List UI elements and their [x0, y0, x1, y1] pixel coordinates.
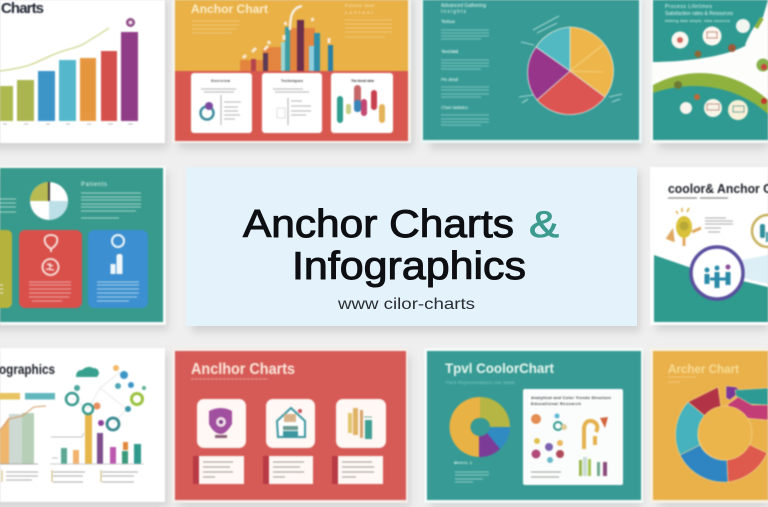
heading: Anclhor Charts [191, 361, 295, 378]
caption text [6, 472, 138, 482]
panel: teal color chart card [424, 348, 643, 503]
icon: people in ring [691, 247, 743, 299]
heading: Process Lifetimes [665, 4, 712, 10]
text block [345, 3, 392, 37]
sub-panel: techniques [262, 73, 322, 133]
heading: Insights [441, 9, 466, 15]
text block: Future text [345, 3, 375, 8]
white infographic panel [523, 389, 623, 485]
legend text: Metric 1 [454, 460, 473, 465]
ampersand: & [529, 204, 559, 245]
skyline bar chart [240, 18, 333, 71]
icon: purple pin [126, 18, 135, 27]
sub-panel: overview [191, 73, 252, 133]
white infographic panel: Educational Research [531, 401, 582, 406]
icons: bottom circles [674, 81, 767, 120]
subheading [668, 197, 728, 199]
sub-panel: trend view: The trend view [351, 79, 374, 83]
panel: white infographics card [0, 348, 165, 502]
column subheadings [441, 19, 469, 110]
network of rings [66, 365, 146, 430]
panel: yellow donut card [650, 348, 768, 503]
sub-panel: trend view [331, 73, 393, 133]
pie callouts [519, 16, 622, 103]
title line 2: Infographics [292, 245, 526, 288]
column subheadings: Pie detail [441, 77, 458, 82]
subheading: Track Representations Use Made [445, 380, 515, 385]
caption 2 [263, 456, 313, 484]
subheading [191, 378, 268, 380]
website url: www cilor-charts [337, 296, 475, 313]
panel: white color anchor card [650, 167, 768, 325]
icon: side circle [752, 215, 768, 247]
heading: Tpvl CoolorChart [445, 360, 554, 376]
heading: Making data simple, data resource [665, 19, 730, 23]
icon tile: eye [197, 399, 246, 448]
green arc [653, 73, 768, 114]
white wave divider [653, 41, 768, 102]
caption 3 [332, 456, 383, 484]
text block [192, 21, 239, 33]
donut chart [449, 397, 510, 457]
icon: side pie [756, 58, 768, 72]
heading: Charts: Charts [1, 0, 44, 17]
panel: teal journey card [651, 0, 768, 143]
panel: bar chart card [0, 0, 165, 143]
text block left [0, 199, 16, 212]
pie chart [528, 27, 614, 115]
heading: Archer Chart [668, 362, 739, 376]
caption 1 [193, 456, 244, 484]
text block [81, 193, 141, 218]
bar chart [50, 413, 144, 464]
card: blue [88, 230, 148, 308]
column subheadings: The focus [441, 19, 456, 24]
icon: cloud [76, 367, 99, 377]
icon: golden figure [668, 208, 701, 246]
heading: Advanced Gathering [441, 3, 486, 9]
text block [705, 218, 733, 232]
column subheadings: Chart statistics [441, 105, 469, 110]
donut chart [676, 386, 768, 482]
heading: sources: Patients [81, 182, 107, 188]
trend line [0, 28, 109, 71]
heading: Satisfaction rates & Resources [665, 11, 734, 17]
icon tile: house [266, 399, 315, 448]
column subheadings: Trend detail [441, 49, 458, 54]
panel: red anchor charts card [172, 348, 408, 503]
white infographic panel: Analytical and Color Trends Structure [531, 395, 612, 400]
legend text [454, 460, 489, 482]
panel: pie chart card [421, 0, 642, 143]
area chart [0, 406, 46, 464]
heading [441, 3, 486, 15]
label pills [0, 393, 55, 400]
subheading [668, 377, 696, 382]
bar chart [0, 32, 138, 124]
icon tile: bars [336, 399, 386, 448]
icons: top circles [672, 18, 762, 58]
panel: central title card [186, 167, 637, 326]
card: red [19, 230, 82, 308]
card: yellow [0, 230, 12, 308]
panel: yellow anchor chart card [172, 0, 411, 143]
pie chart [30, 182, 68, 220]
heading [665, 4, 734, 23]
heading: Anchor Chart: Anchor Chart [191, 2, 268, 16]
arrow: white curl [290, 6, 302, 30]
panel: teal sources card [0, 166, 166, 325]
sub-panel: techniques: Techniques [281, 79, 303, 83]
text block: content [345, 10, 374, 15]
text column [441, 30, 489, 125]
teal hill [654, 255, 768, 322]
sub-panel: overview: Overview [211, 79, 230, 83]
title line 1: Anchor Charts [243, 203, 514, 246]
heading: graphics: ographics [0, 362, 55, 377]
